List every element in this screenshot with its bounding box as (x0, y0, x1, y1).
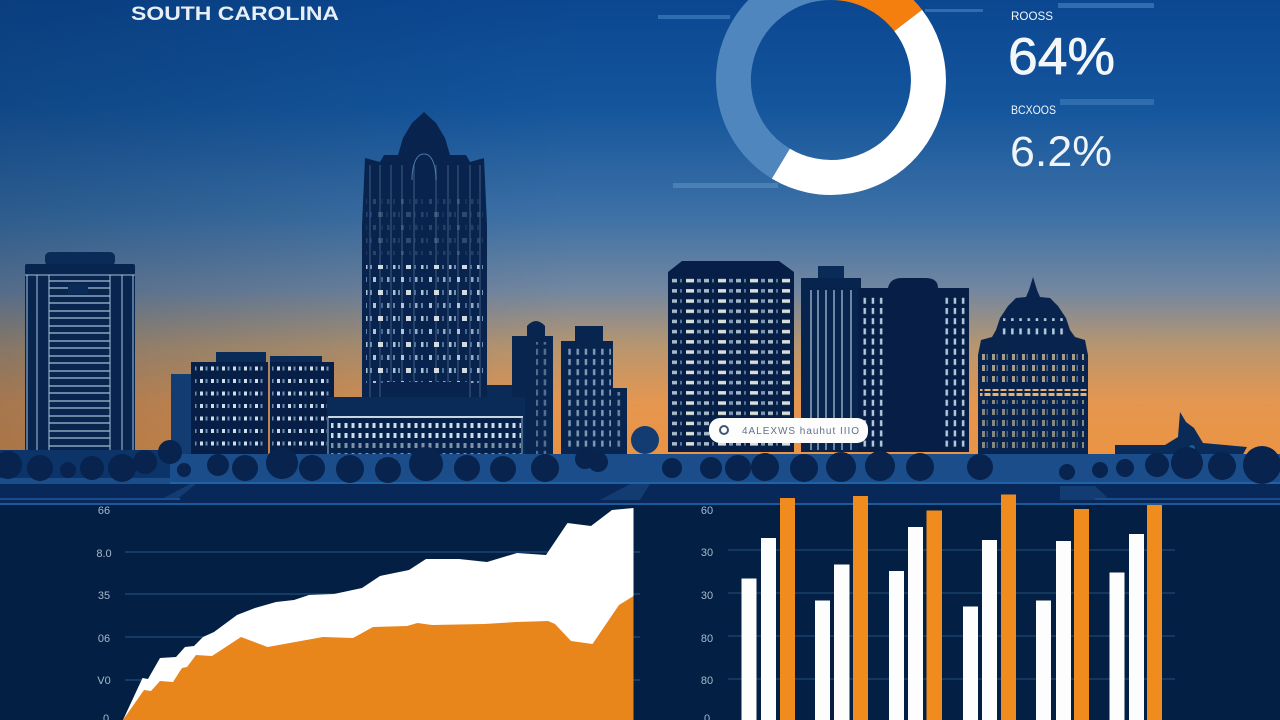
callout icon (720, 426, 728, 434)
stat: second label and value: 6.2% (1010, 128, 1112, 176)
stat: first label and value: ROOSS (1011, 9, 1053, 23)
sky background (0, 0, 1280, 510)
bar chart axis labels: 30 (701, 547, 713, 559)
bar chart (701, 494, 1175, 720)
bars: white series (742, 527, 1144, 720)
stat: second label and value: BCXOOS (1011, 103, 1056, 117)
area series: white (123, 508, 634, 720)
area chart axis labels: 66 (98, 505, 110, 517)
stat: second label and value (1010, 103, 1112, 176)
donut leader lines (658, 3, 1154, 188)
buildings: right striped and dark towers (801, 266, 969, 452)
bar chart axis labels: 60 (701, 505, 713, 517)
bar chart axis labels: 30 (701, 590, 713, 602)
bars: orange series (780, 494, 1162, 720)
monument silhouette (1115, 412, 1247, 460)
waterfront ground (0, 450, 1280, 504)
row of trees (0, 426, 1280, 484)
callout pill (709, 418, 868, 443)
area chart axis labels: 35 (98, 590, 110, 602)
building: right wide block (668, 261, 794, 452)
area chart axis labels (96, 505, 112, 720)
area chart axis labels: 8.0 (96, 548, 112, 560)
bar chart axis labels: 80 (701, 633, 713, 645)
building: low front hall (327, 397, 525, 460)
area chart axis labels: 06 (98, 633, 110, 645)
building: central tall tower (362, 112, 487, 400)
bottom chart panel background (0, 503, 1280, 720)
area chart axis labels: V0 (97, 675, 111, 687)
area series: orange (123, 596, 634, 720)
area chart (96, 505, 640, 720)
donut chart (733, 0, 928, 177)
callout text: 4ALEXWS hauhut IIIO (742, 426, 859, 437)
building: ornate stepped tower (978, 277, 1088, 458)
title: SOUTH CAROLINA (131, 3, 339, 25)
building: left mid block (171, 352, 334, 458)
buildings: narrow towers right of centre (487, 321, 627, 458)
building: left round-top tower (25, 252, 135, 456)
bar chart axis labels: 80 (701, 675, 713, 687)
stat: first label and value: 64% (1008, 28, 1115, 86)
bar chart axis labels (701, 505, 713, 720)
